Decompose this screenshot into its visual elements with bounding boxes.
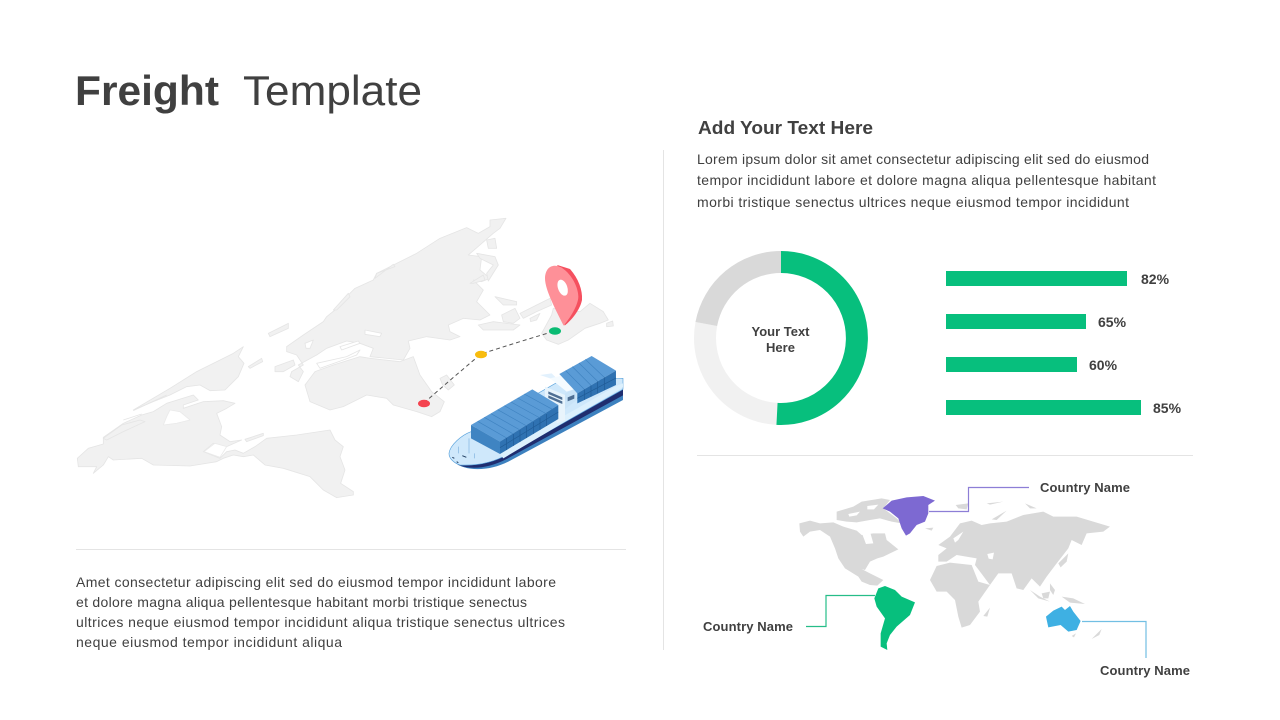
- bar: 85%: [946, 400, 1182, 416]
- segment: mid grey: [706, 262, 781, 324]
- callout: left country: [703, 596, 875, 634]
- bar: 65%: [946, 314, 1127, 330]
- text block: intro: morbi tristique senectus ultrices neque eiusmod tempor incididunt: [697, 194, 1129, 210]
- text block: description: et dolore magna aliqua pellentesque habitant morbi tristique senectus: [76, 594, 527, 610]
- illustration: container ship: [449, 356, 623, 469]
- route line: [418, 327, 561, 407]
- bar: 60%: [946, 357, 1118, 373]
- callout: bottom-right country: Country Name: [1100, 663, 1190, 678]
- bar: 82%: 82%: [1141, 271, 1170, 287]
- donut centre label: [751, 324, 810, 355]
- text block: description: [76, 574, 565, 650]
- bar chart: [946, 271, 1182, 416]
- text block: description: Amet consectetur adipiscing elit sed do eiusmod tempor incididunt labore: [76, 574, 556, 590]
- icon: location pin: [545, 265, 582, 326]
- text block: description: neque eiusmod tempor incididunt aliqua: [76, 634, 342, 650]
- isometric world map: [77, 218, 613, 498]
- text block: description: ultrices neque eiusmod tempor incididunt aliqua tristique senectus ultrices: [76, 614, 565, 630]
- containers: forward stack: [471, 389, 558, 454]
- text block: intro: Lorem ipsum dolor sit amet consectetur adipiscing elit sed do eiusmod: [697, 151, 1149, 167]
- donut chart: [705, 262, 857, 414]
- bar: 65%: 65%: [1098, 314, 1127, 330]
- bar: 85%: 85%: [1153, 400, 1182, 416]
- title: Freight: [75, 67, 219, 114]
- world map: [799, 496, 1110, 650]
- region: South America: [874, 586, 915, 650]
- route stop: green: [549, 327, 561, 335]
- callout: bottom-right country: [1082, 622, 1190, 678]
- donut centre label: Your Text: [751, 324, 810, 339]
- containers: aft stack: [559, 356, 616, 403]
- Americas and Greenland: [77, 347, 353, 498]
- text block: intro: tempor incididunt labore et dolore magna aliqua pellentesque habitant: [697, 172, 1156, 188]
- callout: top country: [929, 480, 1130, 512]
- segment: green: [777, 262, 857, 414]
- bar: 60%: 60%: [1089, 357, 1118, 373]
- donut centre label: Here: [766, 340, 795, 355]
- region: Greenland: [883, 496, 935, 536]
- text block: intro: [697, 151, 1156, 210]
- title: [75, 67, 422, 114]
- Eurasia, Africa and Oceania: [268, 218, 613, 417]
- callout: top country: Country Name: [1040, 480, 1130, 495]
- callout: left country: Country Name: [703, 619, 793, 634]
- route stop: red: [418, 400, 430, 407]
- bar: 82%: [946, 271, 1170, 287]
- title: Template: [243, 67, 422, 114]
- route stop: yellow: [475, 351, 487, 358]
- heading: add your text here: Add Your Text Here: [698, 118, 873, 138]
- superstructure: [540, 373, 577, 423]
- region: Australia: [1046, 606, 1081, 632]
- segment: light: [705, 324, 777, 414]
